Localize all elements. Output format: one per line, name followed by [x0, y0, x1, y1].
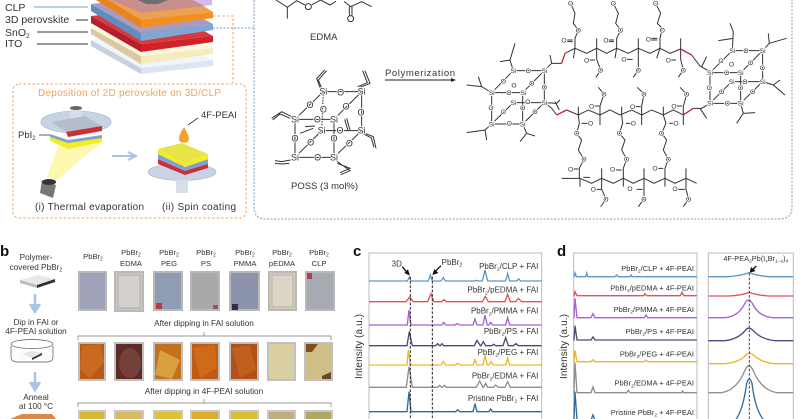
dashed guides — [410, 277, 432, 418]
panel d: full-range chart — [574, 253, 697, 419]
arrow: down to dip — [30, 294, 40, 312]
sample labels: Pristine PbBr — [468, 394, 514, 403]
panel d: heading letter: d — [557, 243, 566, 260]
sample labels: PbBr — [471, 307, 489, 316]
cage atoms: O — [568, 166, 573, 173]
cage atoms: O — [681, 67, 686, 74]
panel b: column labels: 2 — [100, 256, 103, 262]
panel b: heading letter: b — [0, 243, 9, 260]
panel b: column labels: PbBr — [272, 248, 289, 257]
peak label: 2 — [749, 258, 752, 264]
cage atoms: O — [589, 103, 594, 110]
panel b: process column: 2 — [59, 268, 62, 274]
molecule: POSS: Si — [319, 87, 327, 97]
panel b: column labels: PbBr — [309, 248, 326, 257]
cage atoms: O — [750, 89, 755, 96]
molecule: POSS: Si — [291, 152, 299, 162]
stack layer labels: 2 — [26, 33, 30, 40]
caption: after 4F-PEAI: After dipping in 4F-PEAI solution — [145, 387, 264, 396]
cage atoms: O — [672, 186, 678, 193]
backbone chains — [467, 3, 787, 207]
sample labels: 2 — [489, 311, 492, 317]
stack layer labels: ITO — [5, 38, 22, 50]
cage atoms: O — [684, 91, 689, 98]
sample labels: 2 — [490, 376, 493, 382]
panel b: column labels: PMMA — [234, 259, 257, 268]
sample labels — [610, 264, 694, 419]
cage atoms: O — [598, 67, 603, 74]
icon: dish — [11, 340, 53, 362]
stack layer labels — [5, 2, 88, 50]
cage atoms: O — [506, 90, 512, 97]
cage atoms: O — [511, 82, 517, 89]
cage atoms: O — [591, 187, 596, 194]
cage atoms: O — [659, 131, 664, 138]
panel b: process column: 4F-PEAI solution — [5, 327, 67, 336]
molecule: POSS: O — [314, 114, 321, 124]
sample labels: 2 — [514, 399, 517, 405]
molecule: POSS: O — [320, 104, 327, 114]
cage atoms: Si — [510, 100, 517, 107]
sample labels: /PMMA + 4F-PEAI — [633, 305, 694, 314]
panel a: layer stack — [91, 0, 213, 74]
panel b: column labels: PbBr — [196, 248, 213, 257]
cage atoms: O — [630, 104, 635, 111]
arrows and peak labels: PbBr — [442, 258, 459, 267]
arrow: process — [112, 152, 136, 160]
cage atoms: O — [501, 78, 506, 85]
cage atoms: O — [724, 70, 729, 77]
sample labels: /CLP + FAI — [500, 262, 538, 271]
arrow: down to anneal — [30, 372, 40, 390]
cage atoms: O — [581, 157, 587, 164]
cage atoms: O — [760, 65, 765, 72]
icon: hot plate — [10, 414, 56, 419]
cage atoms: O — [742, 79, 748, 86]
sample labels: Pristine PbBr — [611, 408, 654, 417]
cage atoms: O — [603, 37, 609, 44]
cage atoms: O — [718, 58, 724, 65]
cage atoms: Si — [707, 70, 713, 77]
deposition heading: Deposition of 2D perovskite on 3D/CLP — [38, 88, 221, 99]
cage atoms: O — [725, 101, 730, 108]
cage atoms: O — [624, 157, 629, 164]
dashed guide — [748, 273, 751, 419]
sample labels: /PEG + FAI — [498, 348, 538, 357]
panel: deposition of 2D perovskite — [13, 84, 246, 218]
stack layer labels: 3D perovskite — [5, 14, 69, 26]
peak label: ) — [783, 254, 786, 263]
cage atoms: O — [653, 1, 658, 8]
cage atoms: O — [631, 121, 636, 128]
cage atoms: O — [719, 89, 724, 96]
molecule: POSS: Si — [358, 87, 366, 97]
cage atoms: Si — [729, 79, 735, 86]
sample labels: 2 — [637, 354, 640, 360]
sample labels: /PS + FAI — [504, 327, 538, 336]
panel c: XRD chart — [369, 253, 542, 419]
icon: polymer-covered block — [20, 275, 55, 288]
sample labels: PbBr — [614, 305, 630, 314]
traces — [708, 273, 793, 419]
sample labels: + FAI — [517, 394, 538, 403]
sample labels: /pEDMA + 4F-PEAI — [630, 283, 694, 292]
cage atoms: Si — [489, 121, 495, 128]
arrows and peak labels: 2 — [459, 263, 462, 269]
panel b: photos after 4F-PEAI — [79, 411, 332, 419]
molecule: POSS: O — [336, 126, 343, 136]
molecule: POSS: O — [291, 133, 298, 143]
molecule: POSS: O — [337, 87, 344, 97]
molecule: POSS — [272, 70, 376, 175]
cage atoms: O — [526, 68, 531, 75]
panel b: column labels: CLP — [312, 259, 326, 268]
icon: thermal evaporation — [40, 106, 111, 198]
molecule: POSS: O — [342, 102, 349, 112]
cage atoms: Si — [510, 68, 517, 75]
sample labels: PbBr — [614, 379, 631, 388]
caption: after FAI: After dipping in FAI solution — [154, 319, 254, 328]
cage atoms: Si — [541, 100, 548, 107]
sample labels: 2 — [630, 310, 633, 316]
cage atoms: O — [641, 196, 647, 203]
panel c: heading letter: c — [353, 243, 361, 260]
cage atoms: O — [686, 196, 691, 203]
cage atoms: O — [488, 105, 494, 112]
cage atoms: O — [574, 131, 579, 138]
arrows and peak labels: 3D — [392, 259, 402, 268]
sample labels — [467, 262, 538, 405]
molecule: POSS: Si — [358, 126, 366, 136]
panel b: process column — [5, 253, 67, 419]
Polymerization arrow: Polymerization — [385, 68, 455, 79]
molecule: POSS: Si — [330, 152, 338, 162]
peak label: Pb(I — [752, 254, 765, 263]
sample labels: /EDMA + FAI — [492, 372, 538, 381]
sample labels: 2 — [627, 288, 630, 294]
molecule: EDMA — [276, 0, 372, 22]
cage atoms: O — [520, 105, 525, 112]
red linker segments — [557, 49, 693, 115]
cage atoms: O — [610, 167, 615, 174]
traces — [574, 273, 697, 419]
cage atoms: O — [673, 121, 679, 128]
molecule: POSS: Si — [318, 126, 326, 136]
cage atoms: O — [611, 1, 616, 8]
cage atoms: O — [636, 67, 641, 74]
sample labels: 2 — [631, 383, 634, 389]
panel b: column labels — [83, 248, 329, 268]
caption: thermal evaporation: (i) Thermal evaporation — [35, 202, 144, 213]
cage atoms: O — [588, 121, 593, 128]
cage atoms — [488, 1, 766, 203]
panel b: column labels: pEDMA — [269, 259, 296, 268]
panel d: zoomed 2D peak chart — [708, 253, 793, 419]
EDMA label: EDMA — [310, 32, 338, 43]
sample labels: 2 — [502, 332, 505, 338]
sample labels: + 4F-PEAI — [657, 408, 694, 417]
cage bonds — [492, 51, 763, 124]
molecule: POSS: Si — [330, 114, 338, 124]
cage atoms: O — [671, 103, 677, 110]
cage atoms: Si — [738, 101, 744, 108]
cage atoms: O — [652, 166, 658, 173]
panel b: column labels: 2 — [326, 252, 329, 258]
panel b: column labels: PS — [201, 259, 211, 268]
sample labels: PbBr — [620, 349, 637, 358]
cage atoms: O — [501, 109, 506, 116]
cage atoms: O — [561, 37, 567, 44]
cage atoms: O — [568, 1, 573, 8]
Pbl2 label: PbI — [18, 130, 32, 141]
sample labels: PbBr — [479, 262, 497, 271]
cage atoms: Si — [541, 68, 548, 75]
cage atoms: Si — [520, 121, 526, 128]
caption: spin coating: (ii) Spin coating — [162, 202, 236, 213]
panel b: column labels: PbBr — [159, 248, 176, 257]
crosslinked polymer network — [467, 1, 787, 207]
cage atoms: O — [627, 186, 633, 193]
cage atoms: O — [646, 37, 651, 44]
panel b: column labels: PbBr — [83, 252, 100, 261]
sample labels: PbBr — [621, 264, 638, 273]
sample labels: /PMMA + FAI — [492, 307, 538, 316]
panel c: y-axis label: Intensity (a.u.) — [354, 314, 365, 379]
cage atoms: O — [660, 27, 665, 34]
panel b: column labels: 2 — [252, 252, 255, 258]
cage atoms: O — [666, 57, 671, 64]
panel b: process column: at 100 °C — [19, 402, 53, 411]
sample labels: /pEDMA + FAI — [488, 286, 538, 295]
panel b: column labels: 2 — [213, 252, 216, 258]
panel b: column labels: PEG — [161, 259, 177, 268]
cage atoms: Si — [738, 70, 744, 77]
sample labels: 2 — [495, 353, 498, 359]
molecule: POSS: O — [346, 138, 353, 148]
peak label: x — [765, 258, 768, 264]
molecule: POSS: O — [307, 138, 314, 148]
cage atoms: Si — [760, 48, 766, 55]
peak label: 4F-PEA — [723, 254, 749, 263]
sample labels: /PEG + 4F-PEAI — [639, 349, 694, 358]
cage atoms: O — [617, 131, 622, 138]
cage atoms: O — [603, 196, 609, 203]
molecule: POSS: O — [357, 108, 364, 118]
cage atoms: O — [666, 157, 671, 164]
cage atoms: Si — [760, 79, 766, 86]
cage atoms: O — [584, 57, 589, 64]
sample labels: PbBr — [626, 327, 642, 336]
molecule: POSS: Si — [291, 114, 299, 124]
panel b: process column: Polymer- — [20, 253, 53, 262]
sample labels: /PS + 4F-PEAI — [645, 327, 694, 336]
4F-PEAI label: 4F-PEAI — [201, 110, 237, 121]
arrows and peak labels — [392, 258, 462, 276]
sample labels: PbBr — [484, 327, 502, 336]
panel b: column labels: PbBr — [121, 248, 138, 257]
sample labels: /CLP + 4F-PEAI — [641, 264, 694, 273]
panel b: process column: Dip in FAI or — [13, 318, 59, 327]
cage atoms: O — [532, 109, 538, 116]
stack layer labels: SnO — [5, 27, 26, 39]
cage atoms: O — [729, 62, 734, 69]
cage atoms: O — [601, 91, 607, 98]
bracket: FAI row — [78, 332, 331, 340]
POSS label: POSS (3 mol%) — [291, 181, 358, 192]
arrow: 2D peak — [750, 266, 756, 273]
panel b: photos before dipping — [79, 272, 334, 311]
cage atoms: Si — [489, 90, 495, 97]
bracket: 4F-PEAI row — [78, 399, 331, 407]
panel b: column labels: 2 — [176, 252, 179, 258]
panel a: blue connector and polymer box — [213, 0, 792, 219]
cage atoms: O — [542, 85, 547, 92]
Pbl2 label: 2 — [32, 136, 36, 142]
molecule: POSS: O — [330, 133, 337, 143]
cage atoms: O — [576, 27, 581, 34]
cage atoms: O — [743, 48, 749, 55]
cage atoms: O — [507, 121, 512, 128]
panel a: orange connector — [213, 16, 233, 83]
cage atoms: O — [707, 85, 712, 92]
sample labels: /EDMA + 4F-PEAI — [634, 379, 694, 388]
sample labels: PbBr — [610, 283, 627, 292]
peak label: 4 — [786, 258, 789, 264]
cage atoms: Si — [520, 90, 527, 97]
cage atoms: O — [525, 99, 530, 106]
molecule: POSS: O — [306, 100, 313, 110]
panel b: column labels: 2 — [138, 252, 141, 258]
cage atoms: Si — [707, 101, 713, 108]
traces — [369, 270, 542, 412]
sample labels: 2 — [654, 413, 657, 419]
sample labels: PbBr — [478, 348, 495, 357]
panel b: photos after FAI — [79, 343, 332, 380]
panel b: column labels: 2 — [289, 252, 292, 258]
cage atoms: O — [641, 91, 647, 98]
sample labels: PbBr — [472, 372, 490, 381]
cage atoms: Si — [729, 48, 736, 55]
cage atoms: O — [738, 85, 743, 92]
icon: spin coating — [148, 118, 216, 193]
panel b: process column: covered PbBr — [10, 263, 59, 272]
sample labels: 2 — [638, 269, 641, 275]
cage atoms: O — [618, 27, 623, 34]
panel b: column labels: PbBr — [235, 248, 252, 257]
panel b: column labels: EDMA — [120, 259, 143, 268]
cage atoms: O — [621, 57, 627, 64]
peak label: 1–x — [775, 258, 784, 264]
panel b: process column: Anneal — [23, 393, 49, 402]
sample labels: 2 — [642, 332, 645, 338]
sample labels: 2 — [497, 267, 500, 273]
cage atoms: O — [529, 81, 534, 88]
peak label: Br — [768, 254, 776, 263]
panel d: y-axis label: Intensity (a.u.) — [559, 314, 570, 379]
stack layer labels: CLP — [5, 2, 25, 14]
sample labels: PbBr — [467, 286, 485, 295]
molecule: POSS: O — [314, 152, 321, 162]
sample labels: 2 — [485, 290, 488, 296]
cage atoms: O — [748, 60, 753, 67]
